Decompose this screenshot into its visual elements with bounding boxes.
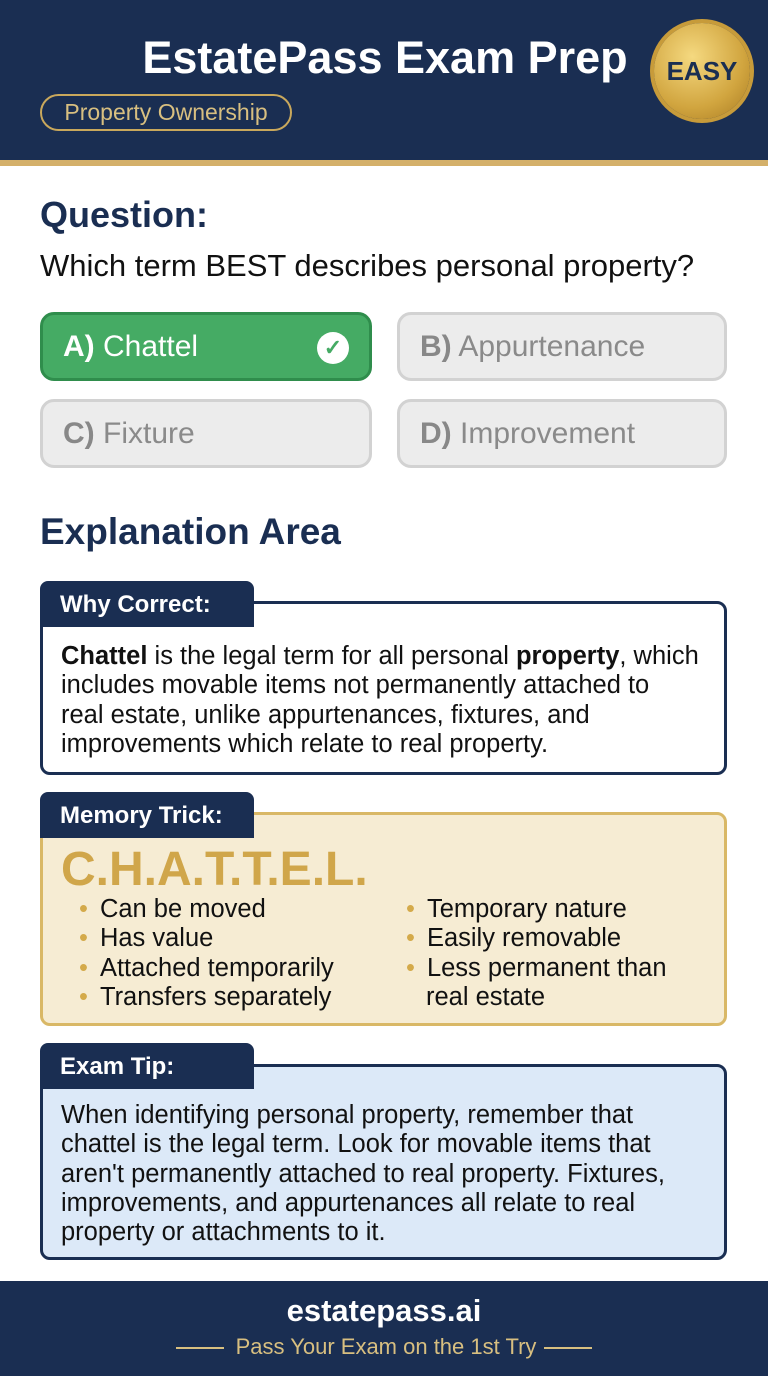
acronym: C.H.A.T.T.E.L.: [61, 843, 368, 896]
tab: memory trick: [40, 792, 254, 838]
option B: [397, 312, 727, 381]
panel: why correct: real estate, unlike appurtenances, fixtures, and: [61, 701, 590, 729]
option A correct: [40, 312, 372, 381]
panel: memory trick: [40, 812, 727, 1026]
option A correct: A) Chattel: [63, 330, 198, 363]
panel: why correct: improvements which relate to real property.: [61, 730, 548, 758]
category pill: [40, 94, 292, 131]
bullet lists: Temporary nature: [427, 895, 627, 923]
panel: exam tip: property or attachments to it.: [61, 1218, 386, 1246]
option C: C) Fixture: [63, 417, 195, 450]
badge: easy: EASY: [667, 56, 737, 86]
bullet lists: Easily removable: [427, 924, 621, 952]
category pill: Property Ownership: [64, 99, 268, 125]
bullet lists: Can be moved: [100, 895, 266, 923]
panel: exam tip: improvements, and appurtenances all relate to real: [61, 1189, 635, 1217]
tab: why correct: Why Correct:: [60, 591, 211, 618]
tab: memory trick: Memory Trick:: [60, 802, 223, 829]
panel: exam tip: aren't permanently attached to real property. Fixtures,: [61, 1160, 665, 1188]
footer: [0, 1281, 768, 1376]
header: [0, 0, 768, 160]
tab: why correct: [40, 581, 254, 627]
tagline: Pass Your Exam on the 1st Try: [236, 1334, 536, 1359]
option D: D) Improvement: [420, 417, 635, 450]
bullet lists: [80, 895, 667, 1011]
panel: why correct: Chattel is the legal term for all personal property, which: [61, 642, 699, 670]
option C: [40, 399, 372, 468]
bullet lists: Attached temporarily: [100, 954, 334, 982]
bullet lists: real estate: [426, 983, 545, 1011]
bullet lists: Less permanent than: [427, 954, 667, 982]
title: EstatePass Exam Prep: [142, 32, 628, 83]
tab: exam tip: [40, 1043, 254, 1089]
panel: exam tip: [40, 1064, 727, 1260]
icon: check: ✓: [324, 335, 342, 360]
question heading: Question:: [40, 194, 208, 235]
panel: why correct: [40, 601, 727, 775]
option D: [397, 399, 727, 468]
tab: exam tip: Exam Tip:: [60, 1053, 174, 1080]
panel: exam tip: chattel is the legal term. Look for movable items that: [61, 1130, 651, 1158]
bullet lists: Transfers separately: [100, 983, 331, 1011]
footer brand: estatepass.ai: [287, 1293, 481, 1328]
bullet lists: Has value: [100, 924, 213, 952]
icon: check: [317, 332, 349, 364]
panel: exam tip: When identifying personal property, remember that: [61, 1101, 633, 1129]
option B: B) Appurtenance: [420, 330, 645, 363]
explanation heading: Explanation Area: [40, 511, 341, 552]
question text: Which term BEST describes personal property?: [40, 248, 694, 283]
panel: why correct: includes movable items not permanently attached to: [61, 671, 649, 699]
badge: easy: [654, 23, 750, 119]
